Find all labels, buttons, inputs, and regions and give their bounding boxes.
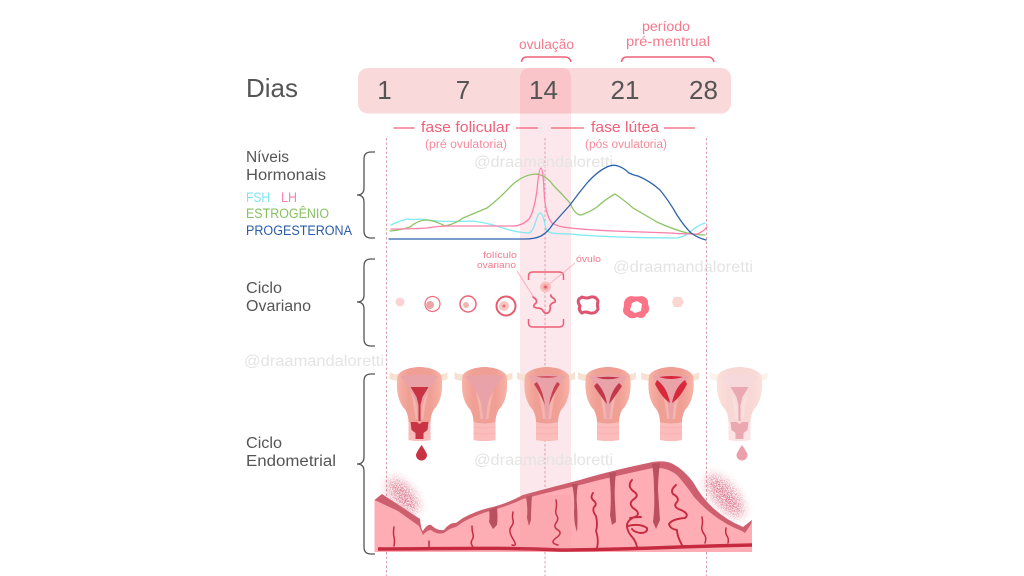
blood drop 2 — [736, 445, 748, 460]
label: fase lútea: fase lútea — [591, 119, 660, 136]
label: período pré-menstrual: pré-mentrual — [626, 34, 710, 49]
legend: hormones — [246, 190, 352, 238]
corpus albicans — [672, 297, 684, 307]
pointer: folículo — [517, 271, 533, 296]
legend: hormones: ESTROGÊNIO — [246, 206, 329, 221]
heading: Ciclo Ovariano: Ciclo — [246, 280, 282, 297]
day 14 highlight — [520, 68, 571, 114]
functional layer band — [374, 461, 752, 535]
curve: blue progesterone — [389, 165, 706, 240]
heading: Ciclo Endometrial — [246, 435, 336, 470]
heading: Ciclo Ovariano: Ovariano — [246, 298, 311, 315]
uterus 2 — [454, 367, 512, 441]
label: período pré-menstrual: período — [642, 19, 690, 34]
day numbers: 14 — [529, 75, 558, 105]
day numbers: 28 — [689, 75, 718, 105]
day dashed guide lines — [386, 138, 706, 576]
brace: endometrial cycle — [357, 374, 375, 554]
uterus 5 — [641, 367, 699, 441]
bracket: ovulação — [522, 57, 571, 62]
curve: green estrogen — [390, 174, 705, 235]
heading: Ciclo Ovariano — [246, 280, 311, 315]
label: fase lútea — [585, 119, 667, 151]
bracket: período pré-menstrual — [622, 57, 714, 62]
label: período pré-menstrual — [626, 19, 710, 49]
label: fase folicular: (pré ovulatoria) — [425, 139, 507, 151]
heading: Níveis Hormonais: Níveis — [246, 149, 289, 166]
uterus 3 — [517, 367, 575, 441]
endometrium — [374, 461, 752, 552]
heading: Ciclo Endometrial: Endometrial — [246, 453, 336, 470]
blood speckle right — [700, 469, 750, 523]
label: folículo ovariano: ovariano — [477, 260, 516, 270]
heading: Níveis Hormonais — [246, 149, 326, 184]
label: ovulação: ovulação — [519, 37, 574, 52]
brace: ovarian cycle — [357, 259, 375, 346]
legend: hormones: FSH — [246, 190, 270, 205]
label: folículo ovariano — [477, 250, 517, 270]
label: fase folicular: fase folicular — [421, 119, 510, 136]
label: folículo ovariano: folículo — [483, 250, 517, 260]
hormone chart — [389, 165, 707, 240]
curve: cyan FSH — [391, 213, 705, 238]
uterus 6: faded — [710, 367, 768, 441]
ovum — [540, 282, 551, 292]
days bar — [358, 68, 731, 114]
ovarian follicles — [396, 272, 684, 327]
follicle 2 — [425, 296, 440, 312]
label: óvulo: óvulo — [576, 254, 601, 265]
tissue base — [374, 461, 752, 552]
heading: Níveis Hormonais: Hormonais — [246, 167, 326, 184]
watermarks: @draamandaloretti — [613, 259, 753, 276]
uterus 1: menstruation — [390, 367, 448, 441]
ovulation highlight column — [520, 113, 571, 550]
corpus luteum small — [578, 297, 598, 313]
label: fase lútea: (pós ovulatoria) — [585, 139, 667, 151]
gland crypts — [489, 463, 660, 532]
uterus 4 — [578, 367, 636, 441]
watermarks: @draamandaloretti — [474, 154, 613, 171]
phase lines — [394, 127, 695, 129]
watermarks — [244, 154, 753, 469]
blood drop 1 — [416, 445, 427, 460]
heading: Ciclo Endometrial: Ciclo — [246, 435, 282, 452]
column tint over endometrium — [520, 495, 571, 550]
brace: hormonal levels — [357, 152, 375, 238]
blood speckle left — [382, 473, 424, 519]
day numbers: 7 — [456, 75, 470, 105]
follicle 4 — [496, 296, 516, 316]
watermarks: @draamandaloretti — [474, 452, 613, 469]
day numbers: 1 — [377, 75, 392, 105]
watermarks: @draamandaloretti — [244, 353, 384, 370]
ruptured follicle — [533, 295, 555, 313]
pointer: óvulo — [547, 263, 575, 286]
corpus luteum large — [623, 296, 649, 318]
follicle 3 — [460, 296, 476, 312]
day numbers: 21 — [611, 75, 639, 105]
ovulation bracket box — [528, 272, 564, 327]
legend: hormones: PROGESTERONA — [246, 223, 352, 238]
day numbers — [377, 75, 718, 105]
follicle 1 — [396, 298, 404, 306]
legend: hormones: LH — [281, 190, 297, 205]
spiral arteries — [394, 480, 728, 548]
heading: Dias: Dias — [246, 73, 298, 103]
label: fase folicular — [421, 119, 510, 151]
curve: pink LH — [391, 168, 707, 234]
basal artery — [378, 545, 752, 550]
